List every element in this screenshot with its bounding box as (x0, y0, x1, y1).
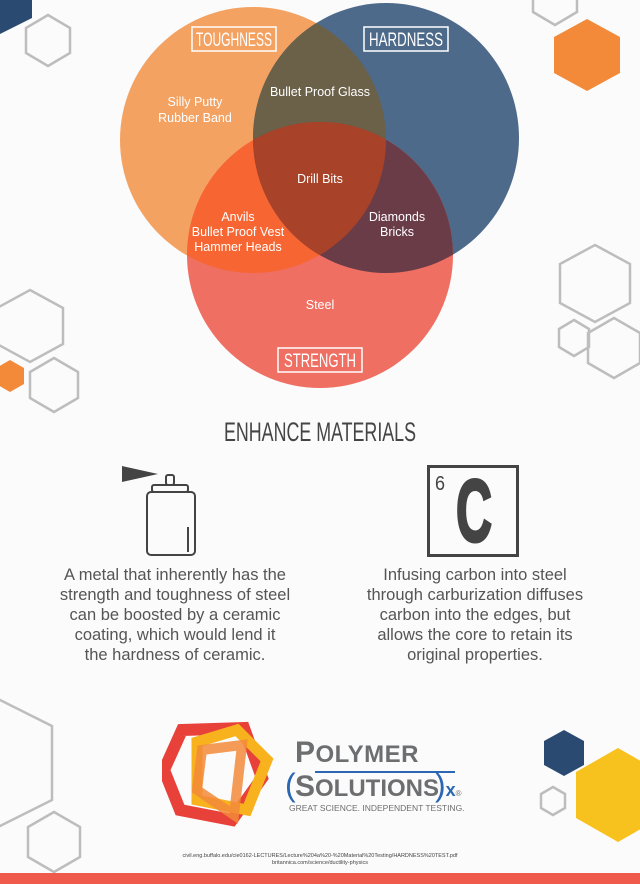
text: ceramic coating: coating, which would lend it (75, 626, 275, 644)
footnote sources: civil.eng.buffalo.edu/cie0162-LECTURES/Lecture%204a%20-%20Material%20Testing/HARDNESS%20TEST.pdf (182, 853, 458, 859)
logo text: SOLUTIONS (295, 770, 439, 803)
icon: carbon element box: 6 (435, 473, 445, 495)
label: strength: STRENGTH (284, 351, 356, 372)
heading: enhance materials: ENHANCE MATERIALS (224, 417, 416, 447)
footnote sources (182, 853, 458, 866)
circle: toughness (120, 7, 386, 273)
text: ceramic coating (60, 566, 290, 664)
logo text: POLYMER (295, 736, 419, 769)
region labels: Diamonds (369, 210, 425, 224)
region labels: Steel (306, 298, 334, 312)
text: ceramic coating: A metal that inherently has the (64, 566, 286, 584)
region labels: Silly Putty (168, 95, 223, 109)
label: strength (278, 348, 362, 372)
circle: strength (187, 122, 453, 388)
region labels: Bullet Proof Glass (270, 85, 370, 99)
region labels: Hammer Heads (194, 240, 282, 254)
text: carburization: through carburization diffuses (367, 586, 583, 604)
text: carburization: original properties. (407, 646, 543, 664)
label: hardness (364, 27, 448, 51)
text: carburization: allows the core to retain its (377, 626, 573, 644)
text: ceramic coating: strength and toughness of steel (60, 586, 290, 604)
logo text: ( (285, 767, 296, 803)
region labels (158, 85, 425, 312)
venn diagram (120, 3, 519, 388)
label: hardness: HARDNESS (369, 30, 443, 51)
bottom bar (0, 873, 640, 884)
logo icon (162, 722, 274, 827)
text: carburization: Infusing carbon into steel (383, 566, 567, 584)
region labels: Bricks (380, 225, 414, 239)
label: toughness: TOUGHNESS (196, 30, 272, 51)
logo text (285, 736, 465, 813)
text: carburization (367, 566, 583, 664)
region labels: Rubber Band (158, 111, 232, 125)
text: ceramic coating: can be boosted by a ceramic (70, 606, 280, 624)
text: ceramic coating: the hardness of ceramic. (85, 646, 265, 664)
icon: carbon element box (427, 465, 519, 559)
text: carburization: carbon into the edges, but (380, 606, 570, 624)
region labels: Anvils (221, 210, 255, 224)
footnote sources: britannica.com/science/ductility-physics (272, 860, 368, 866)
circle: hardness (253, 3, 519, 273)
logo text: )x® (435, 767, 462, 803)
region labels: Drill Bits (297, 172, 343, 186)
logo text: GREAT SCIENCE. INDEPENDENT TESTING. (289, 803, 465, 813)
region labels: Bullet Proof Vest (192, 225, 285, 239)
label: toughness (192, 27, 276, 51)
icon: spray can (122, 466, 196, 556)
